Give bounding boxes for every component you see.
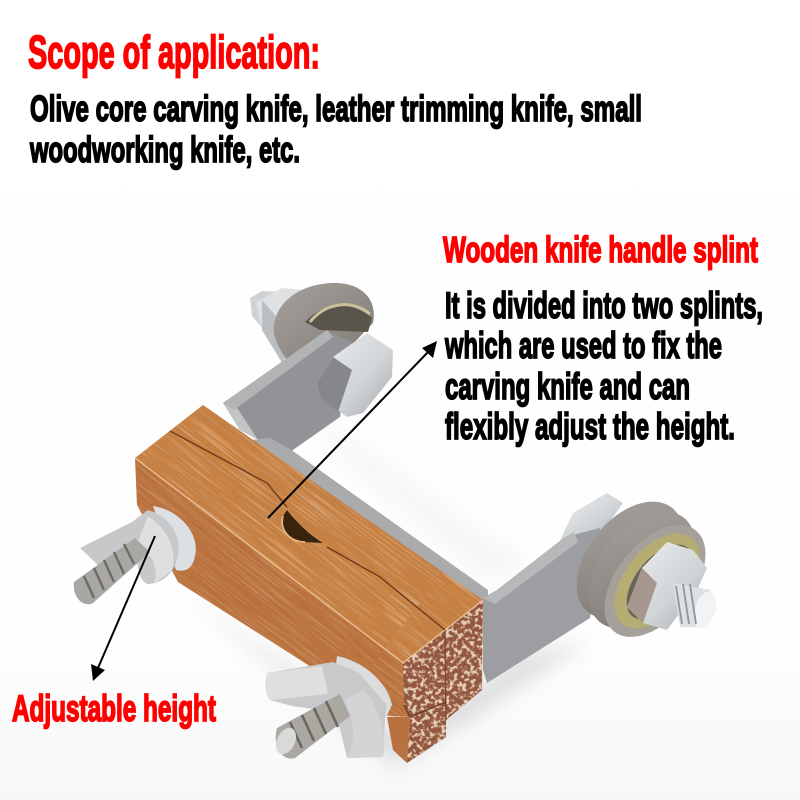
near nut and thread [627,542,720,631]
title: scope of application: Scope of application: [28,26,320,78]
text block: suitable knives: woodworking knife, etc. [29,129,300,170]
end grain [403,600,483,763]
lower splint side [387,717,410,763]
left wing nut [74,506,196,604]
far bearing roller [274,283,374,368]
right wing nut [265,656,392,759]
arrow: to splint description [268,341,437,518]
knife slot [282,510,323,543]
grey bracket, long spine behind wood [250,438,488,615]
hex bolt head [317,333,393,417]
text block: splint description [444,285,763,447]
wood block [135,405,483,763]
saw cut along top [170,431,445,630]
shadows [178,400,590,765]
near bearing roller [555,481,725,655]
grey bracket, near arm [483,528,600,683]
arrow: to adjustable height [91,536,155,681]
far bearing: nut and thread [250,288,306,366]
top face [135,405,483,663]
label: adjustable height: Adjustable height [12,688,216,729]
product photo: splint jig [74,283,725,765]
left side face [135,458,410,717]
near bearing: hex head behind arm [560,493,623,540]
grey angle bracket, far arm [223,331,352,452]
text block: suitable knives [29,88,642,170]
